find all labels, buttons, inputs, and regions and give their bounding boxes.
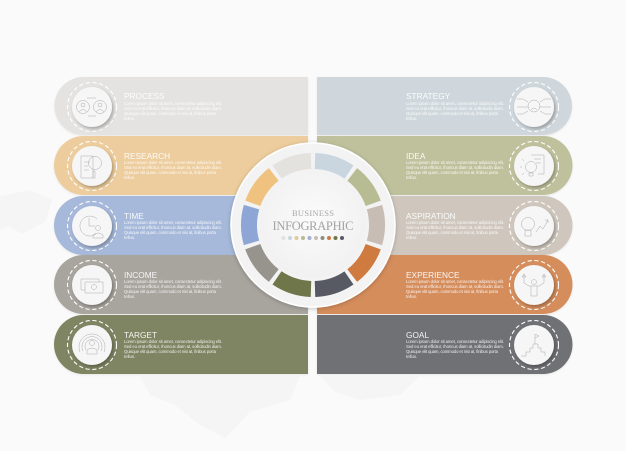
text: aspiration: Quisque elit quam, commodo et nisi at, finibus porta (406, 230, 499, 235)
text: strategy: tellus. (406, 116, 417, 121)
text: process: tellus. (124, 116, 135, 121)
panel: goal (317, 315, 572, 374)
text: time: tellus. (124, 235, 135, 240)
heading: experience: EXPERIENCE (406, 270, 460, 280)
text: idea: Lorem ipsum dolor sit amet, consectetur adipiscing elit. (406, 160, 504, 165)
text: process: Lorem ipsum dolor sit amet, consectetur adipiscing elit. (124, 101, 222, 106)
icon: idea (510, 142, 558, 190)
text: aspiration (406, 220, 504, 240)
icon: time (68, 202, 116, 250)
text: aspiration: Lorem ipsum dolor sit amet, consectetur adipiscing elit. (406, 220, 504, 225)
panel: process (54, 77, 308, 135)
panel: experience (317, 255, 572, 314)
heading: target: TARGET (124, 330, 157, 340)
text: experience: Quisque elit quam, commodo et nisi at, finibus porta (406, 289, 499, 294)
text: income (124, 279, 222, 299)
text: time: Sed eu erat efficitur, rhoncus diam at, sollicitudin diam. (124, 225, 222, 230)
text: strategy (406, 101, 504, 121)
text: goal: tellus. (406, 354, 417, 359)
text: target (124, 339, 222, 359)
panel: target (54, 315, 308, 374)
text: time (124, 220, 222, 240)
text: goal (406, 339, 504, 359)
text: income: Sed eu erat efficitur, rhoncus diam at, sollicitudin diam. (124, 284, 222, 289)
text: target: Lorem ipsum dolor sit amet, consectetur adipiscing elit. (124, 339, 222, 344)
heading: strategy: STRATEGY (406, 91, 451, 101)
text: target: Sed eu erat efficitur, rhoncus diam at, sollicitudin diam. (124, 344, 222, 349)
panel: idea (317, 136, 572, 195)
text: research: Quisque elit quam, commodo et nisi at, finibus porta (124, 170, 217, 175)
text: time: Quisque elit quam, commodo et nisi at, finibus porta (124, 230, 217, 235)
text: experience: Lorem ipsum dolor sit amet, consectetur adipiscing elit. (406, 279, 504, 284)
text: idea: Quisque elit quam, commodo et nisi at, finibus porta (406, 170, 499, 175)
text: process: Quisque elit quam, commodo et nisi at, finibus porta (124, 111, 217, 116)
text: strategy: Lorem ipsum dolor sit amet, consectetur adipiscing elit. (406, 101, 504, 106)
text: goal: Lorem ipsum dolor sit amet, consectetur adipiscing elit. (406, 339, 504, 344)
icon: strategy (510, 82, 558, 132)
text: target: Quisque elit quam, commodo et nisi at, finibus porta (124, 349, 217, 354)
icon: goal (510, 320, 558, 370)
panel: research (54, 136, 308, 195)
icon: target (68, 320, 116, 370)
heading: income: INCOME (124, 270, 158, 280)
heading: aspiration: ASPIRATION (406, 211, 456, 221)
text: aspiration: tellus. (406, 235, 417, 240)
text: income: Lorem ipsum dolor sit amet, consectetur adipiscing elit. (124, 279, 222, 284)
heading: idea: IDEA (406, 151, 426, 161)
text: process (124, 101, 222, 121)
text: process: Sed eu erat efficitur, rhoncus diam at, sollicitudin diam. (124, 106, 222, 111)
icon: research (68, 142, 116, 190)
heading: goal: GOAL (406, 330, 429, 340)
background world map (0, 190, 420, 438)
text: experience: Sed eu erat efficitur, rhoncus diam at, sollicitudin diam. (406, 284, 504, 289)
text: research (124, 160, 222, 180)
icon: aspiration (510, 202, 558, 250)
text: goal: Sed eu erat efficitur, rhoncus diam at, sollicitudin diam. (406, 344, 504, 349)
panel: time (54, 196, 308, 255)
heading: process: PROCESS (124, 91, 165, 101)
text: idea: tellus. (406, 175, 417, 180)
text: strategy: Quisque elit quam, commodo et nisi at, finibus porta (406, 111, 499, 116)
icon: income (68, 260, 116, 310)
heading: business: BUSINESS (292, 208, 334, 218)
panel: aspiration (317, 196, 572, 255)
text: idea: Sed eu erat efficitur, rhoncus diam at, sollicitudin diam. (406, 165, 504, 170)
text: aspiration: Sed eu erat efficitur, rhoncus diam at, sollicitudin diam. (406, 225, 504, 230)
icon: experience (510, 260, 558, 310)
inner disc (260, 172, 366, 278)
central wheel (223, 135, 403, 315)
text: research: Sed eu erat efficitur, rhoncus diam at, sollicitudin diam. (124, 165, 222, 170)
text: research: tellus. (124, 175, 135, 180)
panel: strategy (317, 77, 572, 135)
heading: time: TIME (124, 211, 144, 221)
text: income: Quisque elit quam, commodo et nisi at, finibus porta (124, 289, 217, 294)
heading: research: RESEARCH (124, 151, 170, 161)
wheel segments (223, 135, 403, 315)
text: strategy: Sed eu erat efficitur, rhoncus diam at, sollicitudin diam. (406, 106, 504, 111)
text: research: Lorem ipsum dolor sit amet, consectetur adipiscing elit. (124, 160, 222, 165)
text: income: tellus. (124, 294, 135, 299)
colour dots (282, 236, 344, 240)
text: target: tellus. (124, 354, 135, 359)
text: idea (406, 160, 504, 180)
text: goal: Quisque elit quam, commodo et nisi at, finibus porta (406, 349, 499, 354)
icon: process (68, 82, 116, 132)
text: experience (406, 279, 504, 299)
text: experience: tellus. (406, 294, 417, 299)
text: time: Lorem ipsum dolor sit amet, consectetur adipiscing elit. (124, 220, 222, 225)
panel: income (54, 255, 308, 314)
heading: infographic: INFOGRAPHIC (272, 219, 354, 233)
